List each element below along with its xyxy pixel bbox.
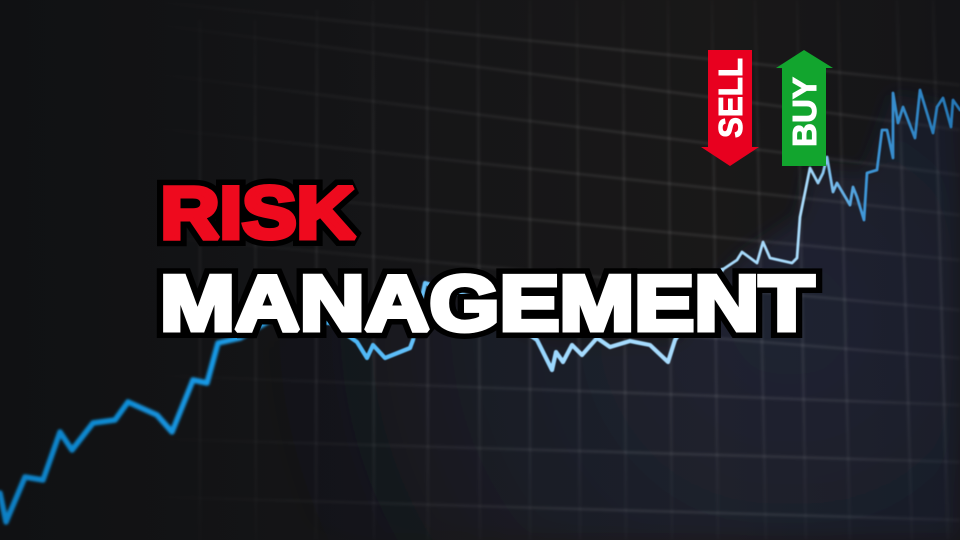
title: RISK: RISK xyxy=(160,173,356,254)
icon: sell arrow xyxy=(701,50,759,166)
title: RISK: RISK xyxy=(160,173,356,254)
title: MANAGEMENT: MANAGEMENT xyxy=(160,259,814,347)
icon: buy arrow xyxy=(776,50,833,166)
title: MANAGEMENT: MANAGEMENT xyxy=(160,259,814,347)
icon: sell arrow: SELL xyxy=(712,58,749,138)
icon: buy arrow: BUY xyxy=(786,77,823,147)
chart area glow xyxy=(170,93,960,540)
line chart: price curve xyxy=(0,90,960,522)
